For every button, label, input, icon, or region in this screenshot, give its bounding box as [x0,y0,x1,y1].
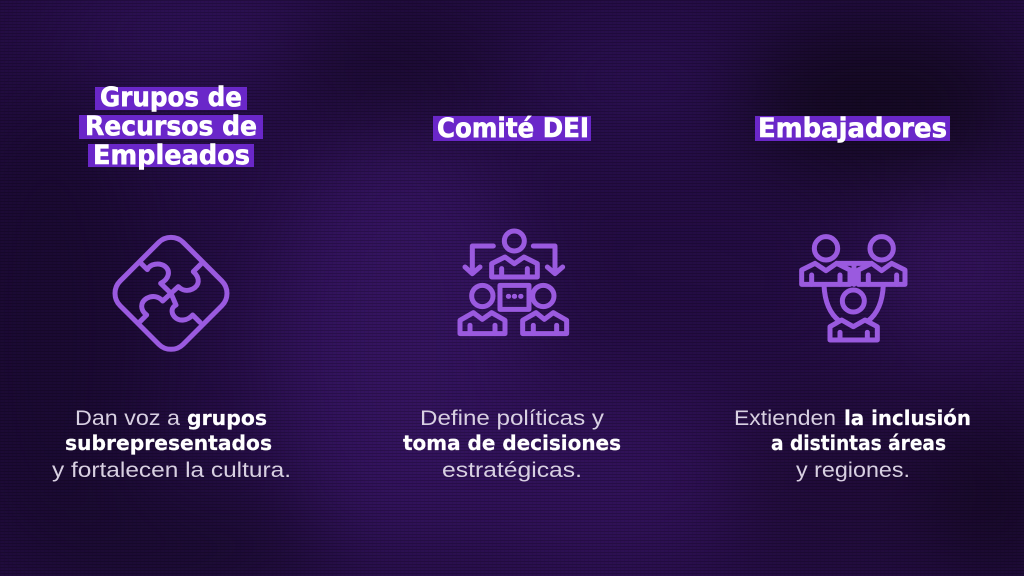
description: Extienden la inclusión: Extienden [734,407,836,430]
description: Define políticas: toma de decisiones [403,431,621,455]
description: Define políticas: Define políticas y [420,407,605,430]
column: Grupos de Recursos de Empleados [52,82,291,482]
heading: Grupos de Recursos de Empleados: Grupos de [100,82,242,113]
icon: ambassadors [802,237,905,340]
description: Dan voz a grupos subrepresentados: y fortalecen la cultura. [52,459,291,482]
description: Dan voz a grupos subrepresentados: subrepresentados [65,431,272,455]
description: Define políticas: estratégicas. [442,459,582,482]
heading: Embajadores: Embajadores [758,113,947,144]
heading: Grupos de Recursos de Empleados: Empleados [93,140,250,171]
column: Comité DEI [403,113,621,482]
column: Embajadores [734,113,971,482]
description: Extienden la inclusión: y regiones. [796,459,910,482]
heading: Grupos de Recursos de Empleados: Recursos de [85,111,257,142]
icon: committee [460,231,567,334]
description: Extienden la inclusión: a distintas áreas [771,431,946,455]
description: Extienden la inclusión [734,406,971,482]
description: Dan voz a grupos subrepresentados [52,406,291,482]
heading: Comité DEI: Comité DEI [437,113,589,144]
description: Define políticas [403,407,621,482]
description: Dan voz a grupos subrepresentados: Dan voz a [75,407,180,430]
description: Extienden la inclusión: la inclusión [844,406,971,430]
heading: Grupos de Recursos de Empleados [79,82,263,171]
icon: puzzle [108,230,234,356]
description: Dan voz a grupos subrepresentados: grupos [187,406,267,430]
